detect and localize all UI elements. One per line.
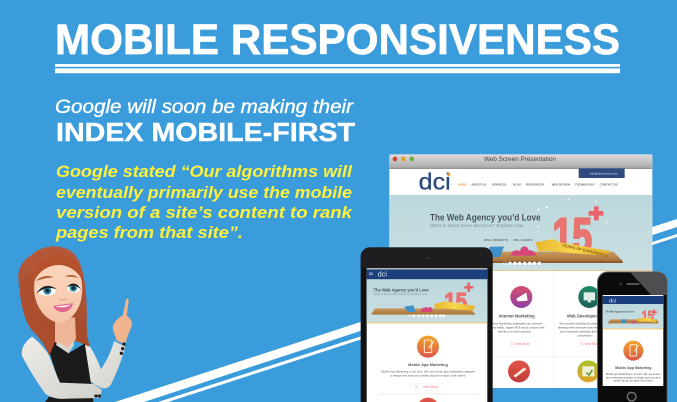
phone hero: The Web Agency you’d Love xyxy=(606,310,634,314)
tablet body xyxy=(361,247,493,402)
right arm sleeve xyxy=(85,341,125,388)
site header: dci xyxy=(419,168,451,194)
yellow quote text: version of a site’s content to rank xyxy=(56,203,354,222)
hero banner: Want to know more about us? Explore now xyxy=(430,223,524,228)
service text: Web Development xyxy=(567,313,604,318)
phone home button xyxy=(627,392,636,401)
icon: megaphone xyxy=(510,286,532,308)
site header: ABOUT US xyxy=(471,183,486,187)
tablet view more button xyxy=(412,383,443,390)
service text: your business activities and xyxy=(560,329,597,333)
service text xyxy=(485,313,604,337)
phone service text: Mobile App Marketing is our forte. We use proven xyxy=(606,373,661,376)
subtitle: INDEX MOBILE-FIRST xyxy=(56,117,355,147)
yellow quote text xyxy=(55,162,354,242)
title bar: Web Screen Presentation xyxy=(484,156,556,163)
tablet hero: Want to know more about us? Explore now xyxy=(374,293,427,296)
phone nav: dci xyxy=(609,299,616,305)
character: woman pointing up xyxy=(18,246,132,402)
site header xyxy=(419,168,625,194)
yellow quote text: Google stated “Our algorithms will xyxy=(56,162,353,181)
tablet mockup xyxy=(361,247,493,402)
tablet hero: The Web Agency you’d Love xyxy=(374,288,429,294)
tablet service text xyxy=(381,363,475,378)
neck xyxy=(55,317,76,353)
hair side lock xyxy=(21,273,53,354)
service text: We provide usability focused xyxy=(559,322,598,326)
phone mockup xyxy=(597,271,668,402)
title double rule xyxy=(55,64,620,73)
hero banner xyxy=(389,195,652,270)
service text: development services that help xyxy=(558,325,599,329)
hair back xyxy=(18,246,91,355)
yellow quote text: eventually primarily use the mobile xyxy=(56,183,352,202)
hero banner: YEARS OF EXPERIENCE xyxy=(561,242,609,258)
face xyxy=(34,265,82,323)
tablet screen xyxy=(367,268,487,402)
hero banner: 500+ CLIENTS xyxy=(513,238,533,242)
tablet hero xyxy=(367,279,487,323)
phone hero: 15 xyxy=(642,309,654,323)
service text: competition xyxy=(577,333,593,337)
hair fringe xyxy=(33,254,83,283)
hero banner: 15 xyxy=(553,208,592,264)
service text: Internet Marketing xyxy=(499,313,535,318)
phone body xyxy=(597,271,668,402)
icon: red circle xyxy=(419,398,437,402)
service text: inbound traffic, higher ROI and a unique web xyxy=(485,325,545,329)
view more buttons xyxy=(508,341,599,347)
tablet nav xyxy=(367,269,487,279)
eyes xyxy=(37,284,81,296)
tablet service text: to design and execute a perfect launch for apps of all niches. xyxy=(390,374,466,378)
site header: RESOURCES xyxy=(526,183,544,187)
site header: info@dcinternet.com xyxy=(590,172,618,176)
subtitle xyxy=(55,96,355,147)
subtitle: Google will soon be making their xyxy=(55,96,355,118)
mouth xyxy=(53,303,73,312)
window body xyxy=(389,154,652,388)
phone service text: perfect launch for apps of all niches. xyxy=(613,380,654,383)
service text: identity for your business. xyxy=(498,329,532,333)
phone hero xyxy=(603,304,663,329)
service text: Internet Marketing strategies can achieve xyxy=(488,322,543,326)
tablet service text: Mobile App Marketing is our forte. We use proven app marketing strategies xyxy=(381,370,475,374)
site header: HOME xyxy=(458,183,467,187)
icon: browser check xyxy=(577,360,599,382)
view more buttons: View More xyxy=(584,342,599,346)
tablet view more button: View More xyxy=(423,385,438,389)
icon: pen xyxy=(508,360,530,382)
cuff buttons xyxy=(94,342,126,398)
desktop browser mockup xyxy=(389,154,652,388)
desktop page services xyxy=(485,270,653,387)
phone service text xyxy=(606,366,661,383)
view more buttons: View More xyxy=(515,342,530,346)
hero banner: 2000+ PROJECTS xyxy=(484,238,508,242)
diagonal white stripes xyxy=(115,219,677,402)
site header: TECHNOLOGY xyxy=(575,183,595,187)
eyebrows xyxy=(36,276,54,281)
collar xyxy=(56,342,74,353)
site header: BLOG xyxy=(513,183,522,187)
icon: mobile app orange xyxy=(417,336,439,358)
nose xyxy=(59,298,66,300)
left arm sleeve xyxy=(22,337,102,399)
yellow quote text: pages from that site”. xyxy=(55,223,243,242)
hand with pointing finger xyxy=(113,299,132,345)
icon: monitor xyxy=(578,286,600,308)
tablet service text: Mobile App Marketing xyxy=(408,363,448,367)
tablet hero: 15 xyxy=(444,288,467,315)
phone service text: Mobile App Marketing xyxy=(615,366,651,370)
icon: mobile app orange small xyxy=(623,341,643,361)
tablet nav: dci xyxy=(378,270,387,279)
phone screen xyxy=(603,295,663,386)
vest xyxy=(45,342,93,402)
phone nav xyxy=(603,296,663,305)
title bar xyxy=(389,154,652,169)
site header: SERVICES xyxy=(492,183,506,187)
phone service text: app marketing strategies to design and execute a xyxy=(606,376,661,379)
title: MOBILE RESPONSIVENESS xyxy=(55,16,620,64)
hero banner: The Web Agency you’d Love xyxy=(430,212,541,222)
site header: CONTACT US xyxy=(600,183,618,187)
site header: WEB REVIEW xyxy=(552,183,571,187)
